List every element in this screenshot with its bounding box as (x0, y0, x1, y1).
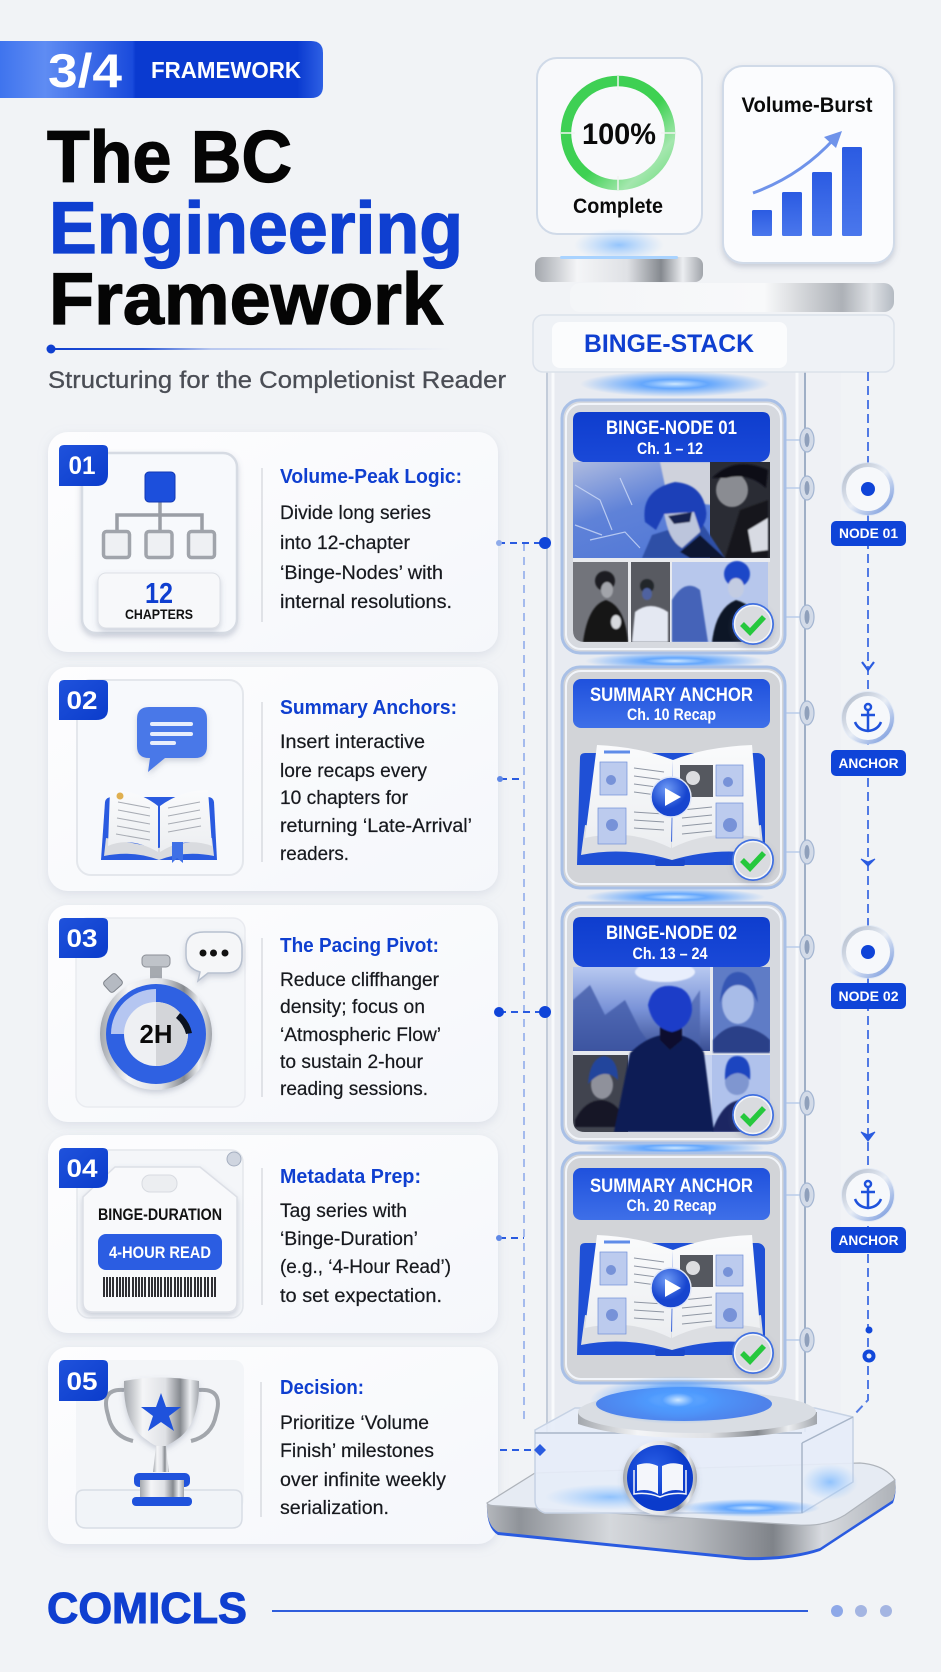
icon: binge-duration tag: BINGE-DURATION (98, 1205, 222, 1224)
header: summary anchor ch. 20: Ch. 20 Recap (626, 1196, 716, 1215)
text: metadata prep: ‘Binge-Duration’ (280, 1229, 418, 1250)
header tab: 3/4 framework: 3/4 (48, 44, 122, 97)
number badge 05: 05 (66, 1368, 98, 1396)
card: binge-node 02 (562, 903, 785, 1143)
text: decision: serialization. (280, 1498, 389, 1519)
number badge 02: 02 (66, 687, 98, 715)
timeline end point (862, 1326, 876, 1362)
icon: node hierarchy on glass (82, 453, 237, 633)
text: metadata prep: to set expectation. (280, 1286, 442, 1307)
recap book with play button (577, 1235, 765, 1356)
number badge 01 (59, 445, 108, 486)
text: decision: Decision: (280, 1377, 364, 1399)
header: summary anchor ch. 20 (573, 1168, 770, 1220)
panel: step 02 summary anchors (48, 667, 498, 891)
icon: check badge (732, 839, 774, 881)
title: Engineering (49, 188, 463, 269)
anchor marker (831, 1168, 906, 1253)
icon: chat bubble and open book (77, 680, 243, 875)
icon: stopwatch with speech bubble (76, 918, 245, 1107)
header: binge-node 01: BINGE-NODE 01 (606, 418, 737, 439)
title: Framework (49, 259, 443, 340)
text: pacing pivot: ‘Atmospheric Flow’ (280, 1025, 441, 1046)
header: summary anchor ch. 10: Ch. 10 Recap (627, 705, 716, 724)
header: summary anchor ch. 20: SUMMARY ANCHOR (590, 1176, 753, 1197)
glow strips between cards (580, 371, 770, 1157)
text: summary anchors: Summary Anchors: (280, 697, 457, 719)
text: volume-peak logic (280, 466, 462, 613)
icon: binge-duration tag: 4-HOUR READ (109, 1243, 211, 1262)
text: decision: Prioritize ‘Volume (280, 1413, 429, 1434)
text: summary anchors: returning ‘Late-Arrival’ (280, 816, 472, 837)
footer brand: COMICLS (47, 1584, 247, 1633)
connector lines from cards to stack (494, 537, 551, 1456)
manga art 02 (573, 962, 770, 1132)
text: summary anchors: 10 chapters for (280, 788, 409, 809)
icon: stopwatch with speech bubble: 2H (140, 1019, 172, 1049)
panel: step 01 volume-peak logic (48, 432, 498, 652)
card: summary anchor ch. 20 (562, 1153, 785, 1383)
header: binge-node 02: BINGE-NODE 02 (606, 923, 737, 944)
binge-stack header: BINGE-STACK (584, 330, 754, 358)
node marker: node 01: NODE 01 (839, 525, 898, 541)
silver base plate (487, 1463, 896, 1560)
progress ring (561, 76, 675, 190)
title rule (46, 344, 451, 354)
text: decision: Finish’ milestones (280, 1441, 434, 1462)
text: summary anchors: readers. (280, 844, 349, 865)
card: summary anchor ch. 10 (562, 667, 785, 888)
icon: node hierarchy on glass: 12 (145, 578, 173, 610)
text: pacing pivot: Reduce cliffhanger (280, 970, 440, 991)
text: volume-peak logic: internal resolutions. (280, 592, 452, 613)
arrow (861, 1132, 875, 1141)
growth arrow (753, 131, 842, 193)
icon: binge-duration tag (77, 1150, 243, 1318)
shelf (570, 283, 894, 312)
panel: step 04 metadata prep (48, 1135, 498, 1333)
header: binge-node 01: Ch. 1 – 12 (637, 439, 703, 458)
bolts on tower edge (777, 428, 814, 1352)
panel: step 03 pacing pivot (48, 905, 498, 1122)
anchor marker: ANCHOR (838, 755, 898, 771)
text: metadata prep: Metadata Prep: (280, 1166, 421, 1188)
number badge 04: 04 (66, 1155, 98, 1183)
text: metadata prep (280, 1166, 451, 1307)
text: summary anchors: lore recaps every (280, 761, 427, 782)
icon: check badge (732, 1094, 774, 1136)
text: summary anchors (280, 697, 472, 865)
text: pacing pivot: reading sessions. (280, 1079, 428, 1100)
text: pacing pivot (280, 935, 441, 1100)
header tab: 3/4 framework (0, 41, 323, 98)
icon: check badge (732, 1332, 774, 1374)
timeline: right-hand progress rail (831, 372, 906, 1416)
blue glow (590, 1376, 772, 1424)
card: 100% complete: 100% (582, 118, 656, 151)
header: binge-node 01 (573, 412, 770, 462)
node marker: node 01 (831, 462, 906, 546)
number badge 04 (59, 1148, 108, 1188)
bars (752, 147, 862, 236)
card: binge-node 01 (562, 400, 785, 653)
card: 100% complete (537, 58, 702, 234)
card: volume-burst chart: Volume-Burst (742, 94, 873, 117)
number badge 01: 01 (68, 452, 96, 480)
footer dots (831, 1605, 892, 1617)
title (47, 117, 463, 340)
text: pacing pivot: The Pacing Pivot: (280, 935, 439, 957)
number badge 02 (59, 680, 108, 720)
binge-stack header (533, 315, 894, 372)
text: metadata prep: Tag series with (280, 1201, 407, 1222)
text: metadata prep: (e.g., ‘4-Hour Read’) (280, 1257, 451, 1278)
subtitle: Structuring for the Completionist Reader (48, 367, 506, 394)
text: volume-peak logic: Divide long series (280, 503, 431, 524)
node marker: node 02 (831, 925, 906, 1009)
card: 100% complete: Complete (573, 195, 663, 218)
icon: trophy (76, 1360, 244, 1528)
header: summary anchor ch. 10: SUMMARY ANCHOR (590, 685, 753, 706)
node marker: node 02: NODE 02 (838, 988, 899, 1004)
anchor marker (831, 691, 906, 776)
header: binge-node 02 (573, 917, 770, 967)
header tab: 3/4 framework: FRAMEWORK (151, 57, 301, 83)
card: volume-burst chart (723, 66, 894, 263)
text: volume-peak logic: ‘Binge-Nodes’ with (280, 563, 443, 584)
glass box (535, 1408, 858, 1517)
text: volume-peak logic: into 12-chapter (280, 533, 411, 554)
number badge 03: 03 (66, 925, 98, 953)
tower: glass column (547, 372, 841, 1432)
panel: step 05 decision (48, 1347, 498, 1544)
text: pacing pivot: to sustain 2-hour (280, 1052, 424, 1073)
book medallion (623, 1441, 697, 1515)
text: volume-peak logic: Volume-Peak Logic: (280, 466, 462, 488)
silver ring (578, 1391, 817, 1438)
arrow (862, 662, 874, 670)
pedestal disc (535, 229, 703, 282)
title: The BC (47, 117, 292, 198)
text: decision: over infinite weekly (280, 1470, 447, 1491)
number badge 05 (59, 1360, 108, 1401)
text: summary anchors: Insert interactive (280, 732, 425, 753)
header: binge-node 02: Ch. 13 – 24 (632, 944, 708, 963)
icon: check badge (732, 603, 774, 645)
manga art 01 (573, 462, 770, 642)
text: pacing pivot: density; focus on (280, 997, 425, 1018)
arrow (861, 859, 875, 866)
recap book with play button (577, 745, 765, 866)
header: summary anchor ch. 10 (573, 679, 770, 728)
number badge 03 (59, 918, 108, 958)
anchor marker: ANCHOR (838, 1232, 898, 1248)
base: silver plate with glass box and medallion (487, 1376, 896, 1560)
footer rule (272, 1610, 808, 1612)
text: decision (280, 1377, 447, 1519)
icon: node hierarchy on glass: CHAPTERS (125, 606, 193, 622)
